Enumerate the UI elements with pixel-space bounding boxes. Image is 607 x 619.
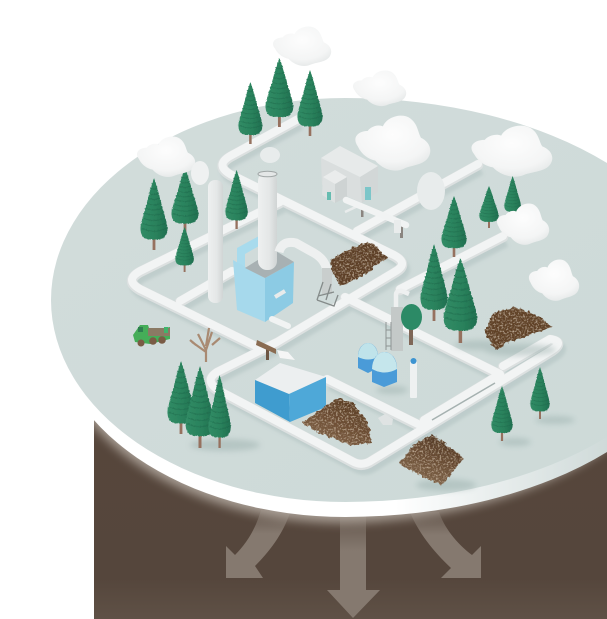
- disk rim: [51, 113, 607, 517]
- cloud: [355, 116, 430, 171]
- tank: [372, 352, 397, 387]
- door: [365, 187, 371, 200]
- trees: bottom right: [491, 367, 550, 441]
- roof: [245, 250, 294, 278]
- cloud blob: [417, 172, 445, 210]
- bare shrub: [190, 328, 220, 362]
- cloud blob: [191, 161, 209, 185]
- boiler outlet pipe: [272, 319, 288, 326]
- mulch pile A: [330, 242, 388, 287]
- tree: [238, 82, 262, 144]
- trees: front left: [167, 361, 231, 448]
- tree: [225, 170, 248, 229]
- tree: [140, 178, 168, 250]
- service pipes: [345, 205, 360, 212]
- cloud: [471, 126, 552, 177]
- main box right face: [360, 166, 378, 203]
- pipe network: [132, 119, 561, 470]
- tree: [491, 386, 513, 441]
- boiler: [233, 171, 294, 322]
- tree: [297, 70, 323, 136]
- cloud blob on pipe: [260, 147, 280, 163]
- tank: [358, 343, 378, 373]
- tree: [441, 196, 467, 257]
- clouds: right: [497, 204, 579, 301]
- valve: [275, 291, 285, 297]
- tree: [171, 168, 199, 233]
- tree: [479, 186, 499, 228]
- signpost: [256, 340, 276, 360]
- main stack: [258, 172, 277, 270]
- back fin: [237, 236, 259, 268]
- left face: [233, 260, 265, 322]
- storage tanks: [358, 343, 397, 387]
- disk surface: [51, 98, 607, 502]
- tree: [444, 258, 477, 343]
- tree: [208, 375, 231, 448]
- truck: [133, 325, 170, 346]
- ladder base: [317, 282, 338, 306]
- arrow: downward right: [410, 512, 481, 578]
- tree: [504, 176, 521, 218]
- cloud: [273, 26, 331, 66]
- soil column: [94, 416, 607, 619]
- disk rim glow: [94, 420, 607, 530]
- object ground shadows: [190, 340, 575, 491]
- trees: right group: [441, 176, 521, 257]
- flue bend pipe: [279, 242, 332, 294]
- main box roof: [321, 146, 378, 177]
- tree: [530, 367, 550, 419]
- small white building: [321, 146, 406, 238]
- main box left face: [321, 158, 362, 203]
- cloud: [137, 136, 195, 177]
- cloud: [529, 260, 579, 301]
- stack rim: [258, 171, 277, 177]
- mulch pile D: [399, 434, 464, 485]
- stack: secondary: [208, 180, 223, 303]
- mulch pile B: [484, 307, 552, 350]
- right face: [265, 262, 294, 322]
- annex: [322, 177, 335, 203]
- blue building: [255, 363, 326, 422]
- mulch pile C: [302, 398, 372, 445]
- pipe arrow tip: [277, 350, 295, 360]
- tree: [167, 361, 195, 434]
- arrow: downward left: [226, 510, 291, 578]
- pipe gap shading: [432, 383, 495, 420]
- tree: [175, 227, 194, 272]
- cloud: [497, 204, 549, 245]
- tree: [185, 366, 215, 448]
- clouds: [137, 26, 552, 210]
- grey tower: [386, 291, 409, 351]
- white post: [410, 358, 417, 398]
- round tree: [401, 304, 422, 345]
- trees: top group: [238, 58, 323, 144]
- tree: [265, 58, 293, 127]
- arrow: downward centre: [327, 515, 380, 618]
- pipe clamp: [378, 414, 393, 425]
- tree: [420, 244, 448, 321]
- trees: left group: [140, 168, 248, 272]
- cloud: [353, 70, 406, 106]
